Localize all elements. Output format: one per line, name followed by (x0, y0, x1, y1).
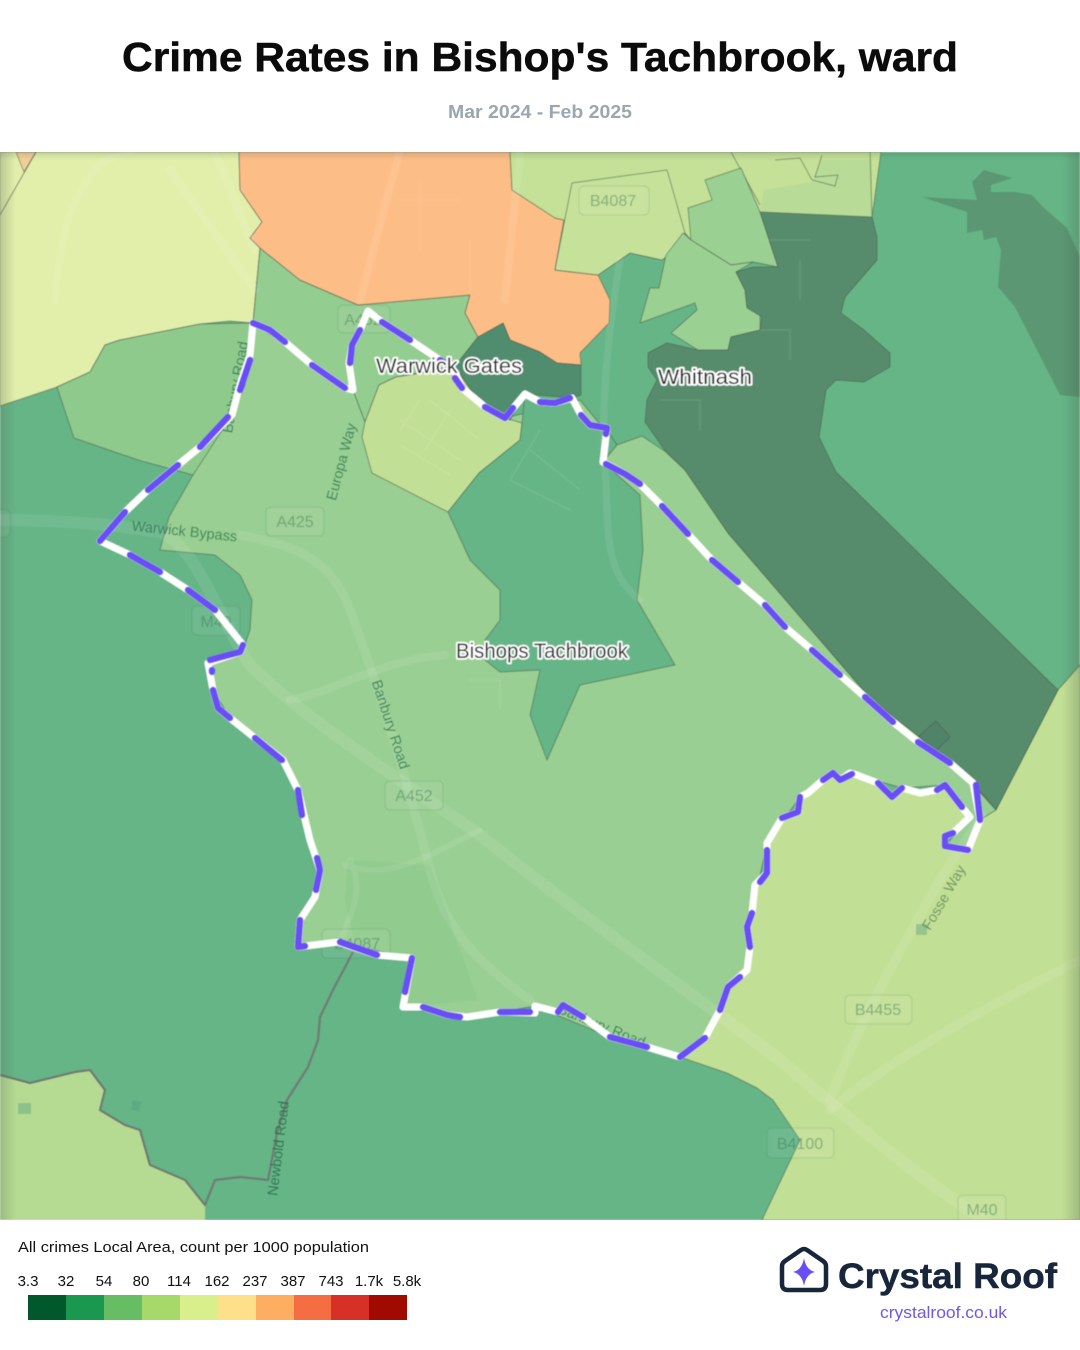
area: north-east dark green (922, 170, 1080, 397)
road name: Banbury Road north: Banbury Road (220, 340, 252, 434)
shield B4100: B4100 (777, 1136, 823, 1153)
legend values: 5.8k (393, 1273, 422, 1290)
shield B4087 south: B4087 (334, 936, 380, 953)
road shields (0, 186, 1006, 1224)
choropleth map (0, 150, 1080, 1224)
shield B4087 south (322, 929, 390, 958)
legend values: 32 (58, 1273, 74, 1290)
legend values: 743 (318, 1273, 344, 1290)
legend values: 114 (167, 1273, 191, 1290)
area: top-left small orange corner (16, 152, 36, 172)
area: main ward light green (159, 328, 996, 1054)
shield B4100 (767, 1128, 834, 1158)
road name: Europa Way: Europa Way (324, 421, 360, 502)
roads and streets (0, 150, 1080, 1220)
area: top right green block (760, 160, 872, 217)
road name: Banbury Road centre: Banbury Road (368, 678, 412, 771)
area: dark green south of orange (455, 323, 581, 420)
legend values: 1.7k (355, 1273, 384, 1290)
website url: crystalroof.co.uk (880, 1304, 1008, 1322)
area: B4087 block (556, 169, 686, 262)
area: south-east yellow green (680, 665, 1080, 1220)
road name: Banbury Road south: Banbury Road (556, 1002, 647, 1051)
title: Crime Rates in Bishop's Tachbrook, ward (122, 34, 958, 80)
legend values: 3.3 (18, 1273, 38, 1290)
area: Warwick Gates yellow green (362, 368, 522, 512)
boundary white line (100, 311, 980, 1057)
road name: Fosse Way: Fosse Way (920, 862, 970, 933)
shield M40 west: M40 (200, 614, 232, 631)
area: yellow green north block (510, 152, 882, 260)
logo wordmark: Crystal Roof (838, 1257, 1057, 1296)
area: mid green base (0, 152, 1080, 1220)
shield edge west (0, 512, 9, 536)
top block notch lines (731, 152, 872, 217)
top-left district line (0, 152, 36, 215)
place label: Whitnash: Whitnash (658, 365, 752, 389)
area: south-west yellow green (0, 1070, 205, 1220)
subtitle: date range: Mar 2024 - Feb 2025 (448, 101, 632, 122)
ward boundary (100, 311, 980, 1057)
side vignette (0, 152, 1080, 1220)
legend title: All crimes Local Area, count per 1000 population (18, 1239, 369, 1256)
shield A452 north (338, 305, 390, 333)
shield A452 north: A452 (344, 312, 382, 329)
shield B4455: B4455 (855, 1002, 901, 1019)
area: north-west pale yellow (0, 152, 262, 406)
place label: Bishops Tachbrook: Bishops Tachbrook (456, 639, 628, 663)
boundary purple dashes (100, 322, 980, 1057)
shield B4455 (845, 995, 912, 1024)
legend values: 387 (280, 1273, 306, 1290)
logo: Crystal Roof (782, 1249, 1057, 1322)
area: orange high-rate zone (239, 152, 610, 365)
area: west pocket green (57, 323, 253, 475)
shield M40 south (958, 1195, 1006, 1224)
road name: Warwick Bypass: Warwick Bypass (131, 519, 238, 546)
legend values (18, 1273, 422, 1290)
area: Whitnash north light green (640, 233, 760, 350)
shield A425: A425 (276, 514, 314, 531)
legend values: 54 (96, 1273, 112, 1290)
place label: Warwick Gates: Warwick Gates (376, 354, 522, 378)
shield M40 west (194, 608, 238, 634)
legend (18, 1239, 422, 1320)
legend values: 237 (242, 1273, 268, 1290)
shield A425 (266, 507, 324, 536)
grey district boundary (0, 952, 353, 1205)
area: south ward darker block (348, 864, 453, 933)
area: Whitnash dark green (645, 212, 1058, 810)
road name: Newbold Road: Newbold Road (265, 1100, 293, 1197)
area: north ward green (253, 248, 478, 422)
legend values: 80 (133, 1273, 149, 1290)
shield B4087 north (579, 186, 649, 215)
shield A452: A452 (395, 788, 433, 805)
shield A452 (385, 781, 443, 810)
small dark square near boundary (919, 721, 950, 752)
area: central Bishops Tachbrook mid green (448, 394, 675, 760)
shield B4087 north: B4087 (590, 193, 636, 210)
legend values: 162 (204, 1273, 230, 1290)
area: top centre green block (688, 168, 778, 267)
icon: house with star (782, 1249, 826, 1290)
legend colour bar (28, 1295, 407, 1320)
shield M40 south: M40 (966, 1202, 998, 1219)
